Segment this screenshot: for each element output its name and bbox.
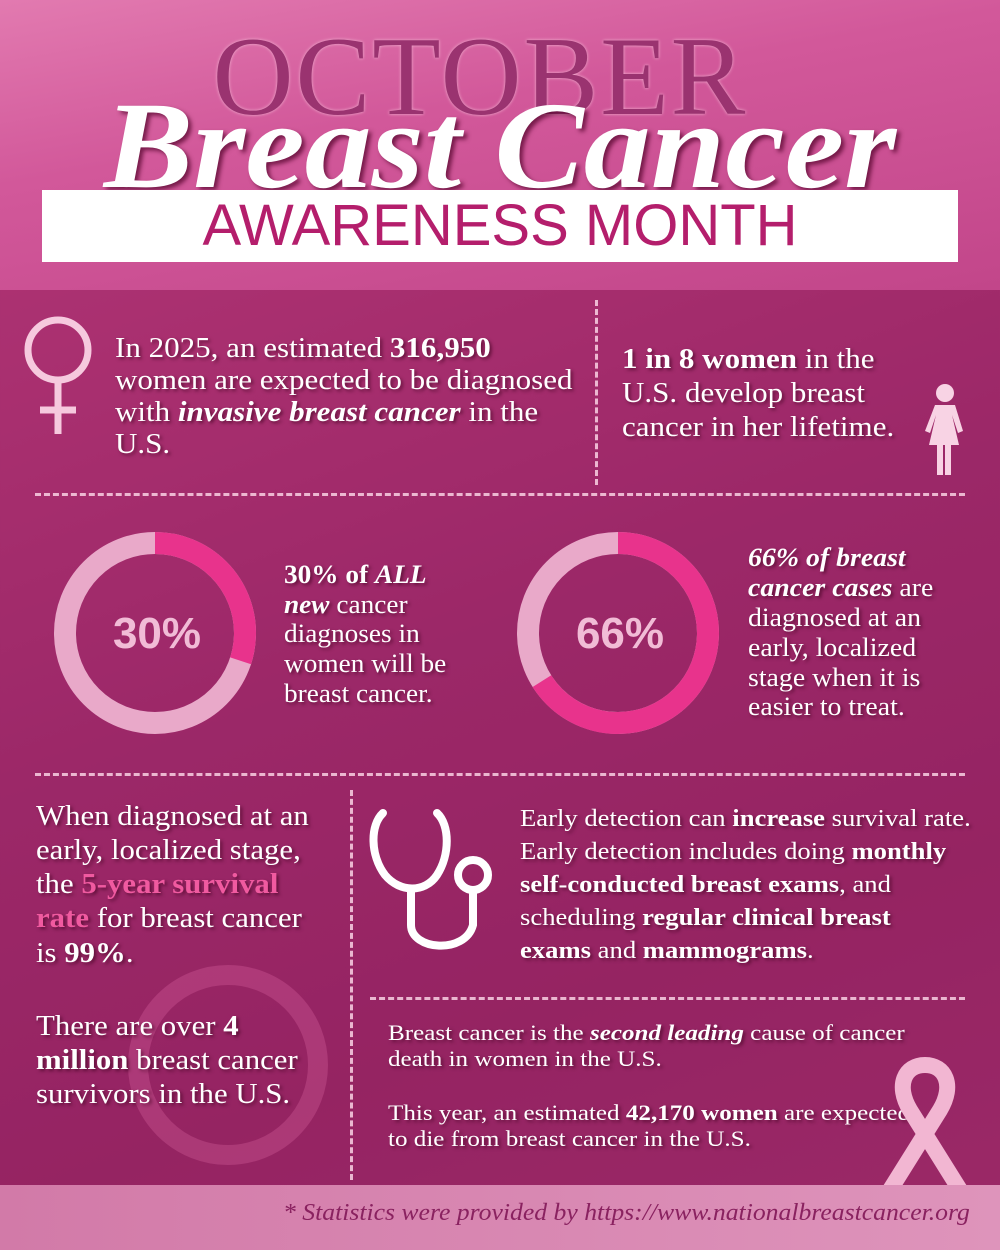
text: 42,170 women: to die from breast cancer in the U.S. (388, 1126, 751, 1151)
icon: pink ribbon (884, 1057, 966, 1185)
text: 316,950 estimate: U.S. (115, 428, 170, 460)
text: 66% early stage: cancer cases are (748, 573, 933, 602)
text: early detection (520, 806, 972, 966)
text: 1 in 8 women (622, 343, 896, 443)
text: 5-year survival: early, localized stage, (36, 835, 301, 866)
text: second leading cause (388, 1020, 908, 1071)
text: early detection: exams and mammograms. (520, 938, 814, 964)
chart: 30% donut (54, 532, 256, 734)
text: early detection: self-conducted breast exams, and (520, 872, 891, 898)
text: 66% early stage: stage when it is (748, 663, 920, 692)
text: 30% of all new cancer: 30% of ALL (284, 560, 427, 589)
icon: female symbol (24, 316, 92, 434)
text: 5-year survival: When diagnosed at an (36, 801, 309, 832)
chart: 66% donut (517, 532, 719, 734)
text: early detection: Early detection includes doing monthly (520, 839, 946, 865)
text: 66% early stage (748, 543, 936, 721)
icon: stethoscope (370, 809, 492, 950)
text: 316,950 estimate: women are expected to be diagnosed (115, 364, 573, 396)
title banner: Awareness Month: AWARENESS MONTH (202, 193, 798, 258)
text: 5-year survival: rate for breast cancer (36, 903, 302, 934)
text: 42,170 women: This year, an estimated 42,170 women are expected (388, 1100, 910, 1125)
title: Breast Cancer: Breast Cancer (104, 77, 896, 214)
text: 30% of all new cancer: women will be (284, 649, 446, 678)
text: 30% of all new cancer: breast cancer. (284, 678, 433, 708)
chart: 30% donut: 30% (113, 609, 201, 658)
text: 66% early stage: early, localized (748, 633, 916, 662)
text: 30% of all new cancer: new cancer (284, 590, 408, 619)
text: 5-year survival (36, 801, 311, 969)
header background (0, 0, 1000, 290)
text: 30% of all new cancer: diagnoses in (284, 619, 420, 648)
text: 316,950 estimate: In 2025, an estimated 316,950 (115, 332, 491, 364)
text: 1 in 8 women: 1 in 8 women in the (622, 343, 875, 375)
text: 1 in 8 women: U.S. develop breast (622, 377, 865, 409)
text: early detection: Early detection can increase survival rate. (520, 806, 971, 832)
text: 5-year survival: is 99%. (36, 938, 134, 969)
title: October: OCTOBER (213, 15, 747, 139)
footer: source note: * Statistics were provided by https://www.nationalbreastcancer.org (283, 1200, 970, 1226)
text: 42,170 women (388, 1100, 910, 1151)
text: 66% early stage: 66% of breast (748, 543, 906, 572)
text: 316,950 estimate: with invasive breast cancer in the (115, 396, 538, 428)
text: second leading cause: death in women in the U.S. (388, 1046, 662, 1071)
decorative faint ring (128, 965, 328, 1165)
text: early detection: scheduling regular clinical breast (520, 905, 891, 931)
text: 4 million survivors: There are over 4 (36, 1011, 239, 1042)
text: 4 million survivors: survivors in the U.S. (36, 1079, 290, 1110)
text: 4 million survivors (36, 1011, 301, 1110)
text: 66% early stage: diagnosed at an (748, 603, 921, 632)
text: second leading cause: Breast cancer is the second leading cause of cancer (388, 1020, 905, 1045)
chart: 66% donut: 66% (576, 609, 664, 658)
footer bar (0, 1185, 1000, 1250)
main panel background (0, 290, 1000, 1185)
text: 4 million survivors: million breast cancer (36, 1045, 298, 1076)
text: 66% early stage: easier to treat. (748, 692, 905, 721)
title banner: Awareness Month (42, 190, 958, 262)
text: 5-year survival: the 5-year survival (36, 869, 278, 900)
icon: woman figure (925, 384, 963, 475)
text: 1 in 8 women: cancer in her lifetime. (622, 411, 894, 443)
text: 30% of all new cancer (284, 560, 449, 708)
text: 316,950 estimate (115, 332, 574, 460)
